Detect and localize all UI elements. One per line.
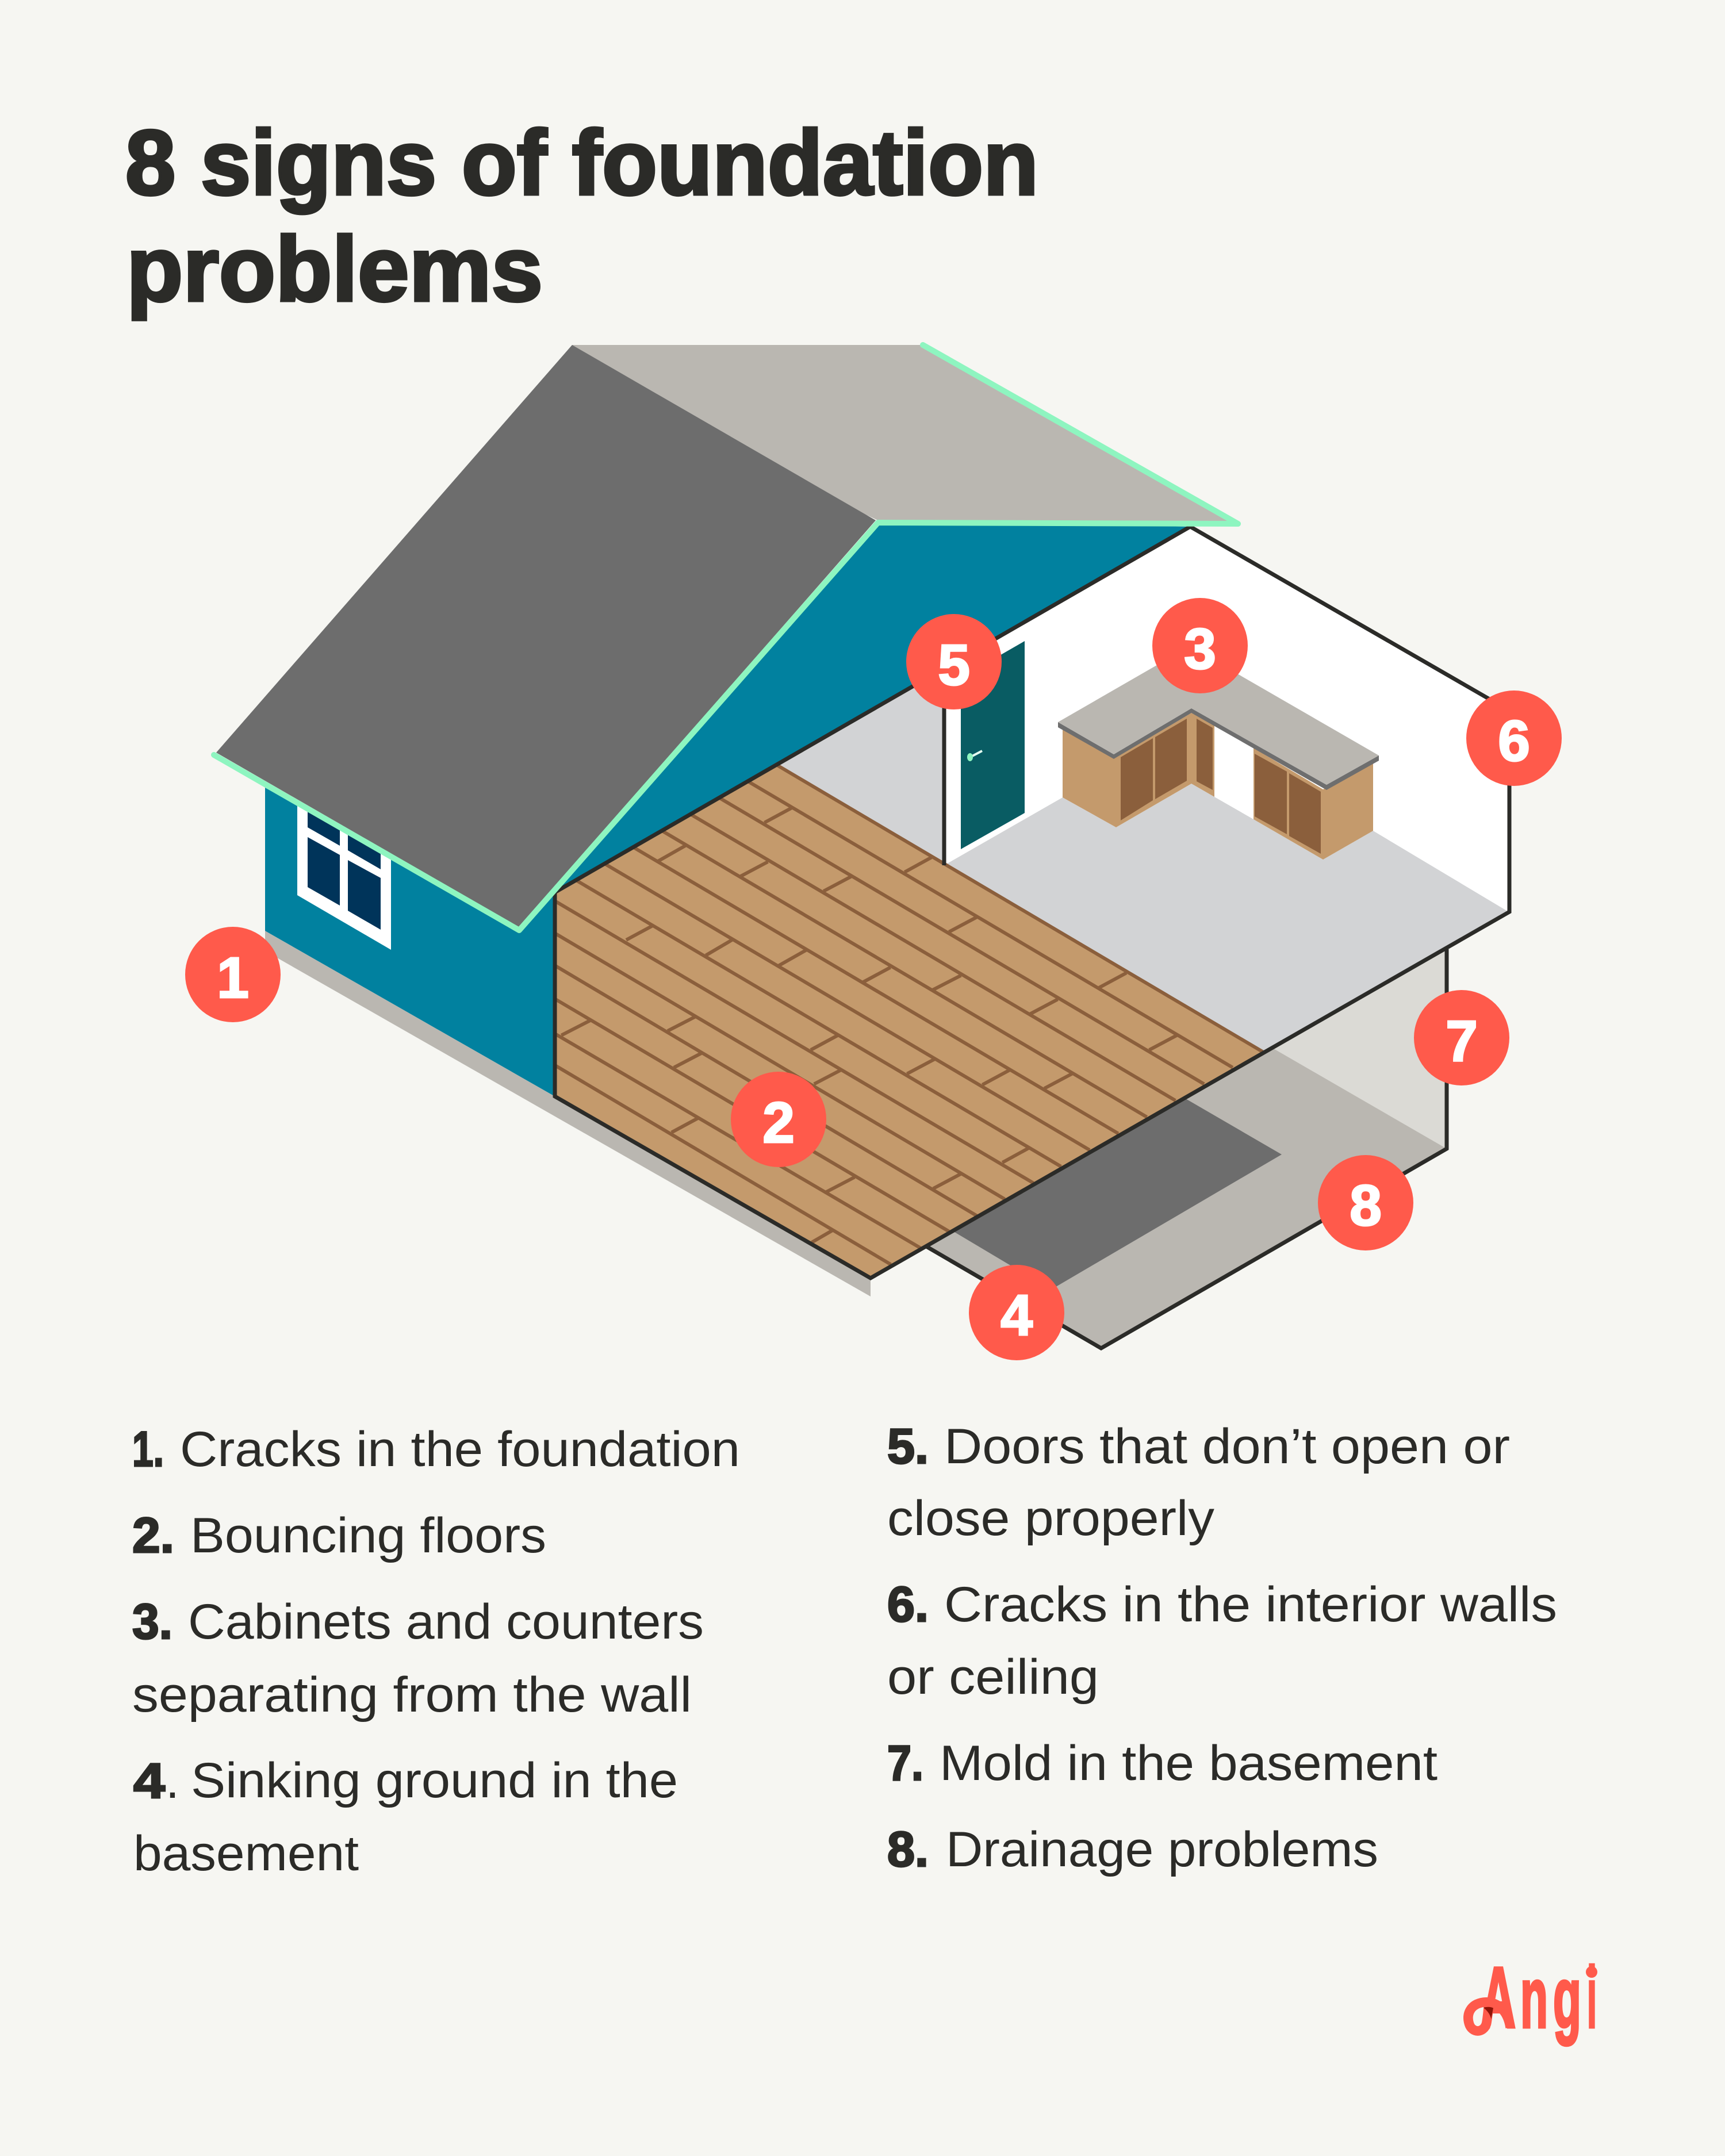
marker 3 bbox=[1152, 598, 1248, 693]
list item 5 bbox=[887, 1419, 1510, 1546]
sinking ground patch bbox=[954, 1099, 1282, 1290]
logo: Angi: A bbox=[1481, 1949, 1516, 2046]
roof: dark side bbox=[216, 345, 876, 927]
list item 4: Sinking ground in the bbox=[191, 1753, 678, 1808]
roof: light side bbox=[572, 345, 1241, 524]
text: i bbox=[1587, 1949, 1597, 2046]
wood floor bbox=[555, 764, 1263, 1278]
list item 6 bbox=[887, 1577, 1557, 1705]
list item 5: 5. bbox=[887, 1419, 929, 1474]
logo: Angi: n bbox=[1520, 1949, 1548, 2046]
list item 3: separating from the wall bbox=[132, 1667, 692, 1723]
marker 8 bbox=[1318, 1155, 1413, 1250]
marker 2 bbox=[731, 1072, 826, 1167]
basement floor bbox=[926, 1049, 1447, 1348]
basement wall bbox=[1263, 949, 1447, 1149]
marker 4: 4 bbox=[1000, 1283, 1033, 1348]
list item 2: Bouncing floors bbox=[190, 1508, 546, 1563]
list item 1: 1. bbox=[132, 1422, 164, 1477]
marker 6 bbox=[1466, 690, 1562, 786]
title bbox=[125, 111, 1038, 320]
interior white wall bbox=[944, 527, 1509, 912]
list item 4 bbox=[133, 1753, 678, 1881]
title: problems bbox=[126, 217, 543, 320]
marker 3: 3 bbox=[1184, 617, 1216, 681]
exterior teal wall bbox=[265, 520, 1190, 1096]
marker 6: 6 bbox=[1498, 709, 1530, 773]
title: 8 signs of foundation bbox=[125, 111, 1038, 214]
cabinets and counter bbox=[1058, 646, 1379, 860]
list item 7: Mold in the basement bbox=[940, 1736, 1438, 1791]
foundation shadow strip bbox=[265, 931, 871, 1296]
room floor bbox=[775, 668, 1508, 1052]
basement outline bbox=[926, 949, 1447, 1348]
marker 1 bbox=[185, 927, 281, 1022]
list item 6: Cracks in the interior walls bbox=[944, 1577, 1557, 1632]
list item 5: close properly bbox=[887, 1491, 1214, 1546]
list item 4: 4 bbox=[133, 1754, 165, 1809]
marker 4 bbox=[969, 1265, 1064, 1360]
list item 6: 6. bbox=[887, 1577, 929, 1632]
logo: Angi: g bbox=[1553, 1949, 1581, 2046]
marker 7 bbox=[1414, 990, 1509, 1085]
logo: Angi bbox=[1468, 1949, 1597, 2046]
door handle bbox=[967, 751, 982, 761]
list item 4: . bbox=[166, 1754, 179, 1809]
list item 8: Drainage problems bbox=[946, 1822, 1378, 1877]
roof trim bbox=[214, 345, 1238, 930]
window bbox=[297, 805, 391, 950]
list item 7: 7. bbox=[887, 1736, 923, 1791]
door bbox=[961, 641, 1025, 849]
marker 1: 1 bbox=[217, 946, 249, 1010]
list item 4: basement bbox=[133, 1826, 359, 1881]
marker 2: 2 bbox=[762, 1091, 795, 1155]
illustration: isometric house cutaway bbox=[214, 345, 1509, 1348]
marker 8: 8 bbox=[1350, 1173, 1382, 1238]
list item 5: Doors that don’t open or bbox=[944, 1419, 1510, 1474]
list item 2: 2. bbox=[132, 1508, 174, 1563]
list item 8: 8. bbox=[887, 1822, 929, 1877]
marker 5: 5 bbox=[938, 633, 970, 697]
list item 3: Cabinets and counters bbox=[188, 1594, 704, 1649]
list item 1: Cracks in the foundation bbox=[180, 1422, 740, 1477]
list item 3: 3. bbox=[132, 1594, 172, 1649]
marker 5 bbox=[906, 614, 1002, 709]
marker 7: 7 bbox=[1446, 1009, 1478, 1073]
house outline bbox=[555, 527, 1509, 1278]
list item 3 bbox=[132, 1594, 704, 1723]
list item 6: or ceiling bbox=[887, 1649, 1099, 1705]
